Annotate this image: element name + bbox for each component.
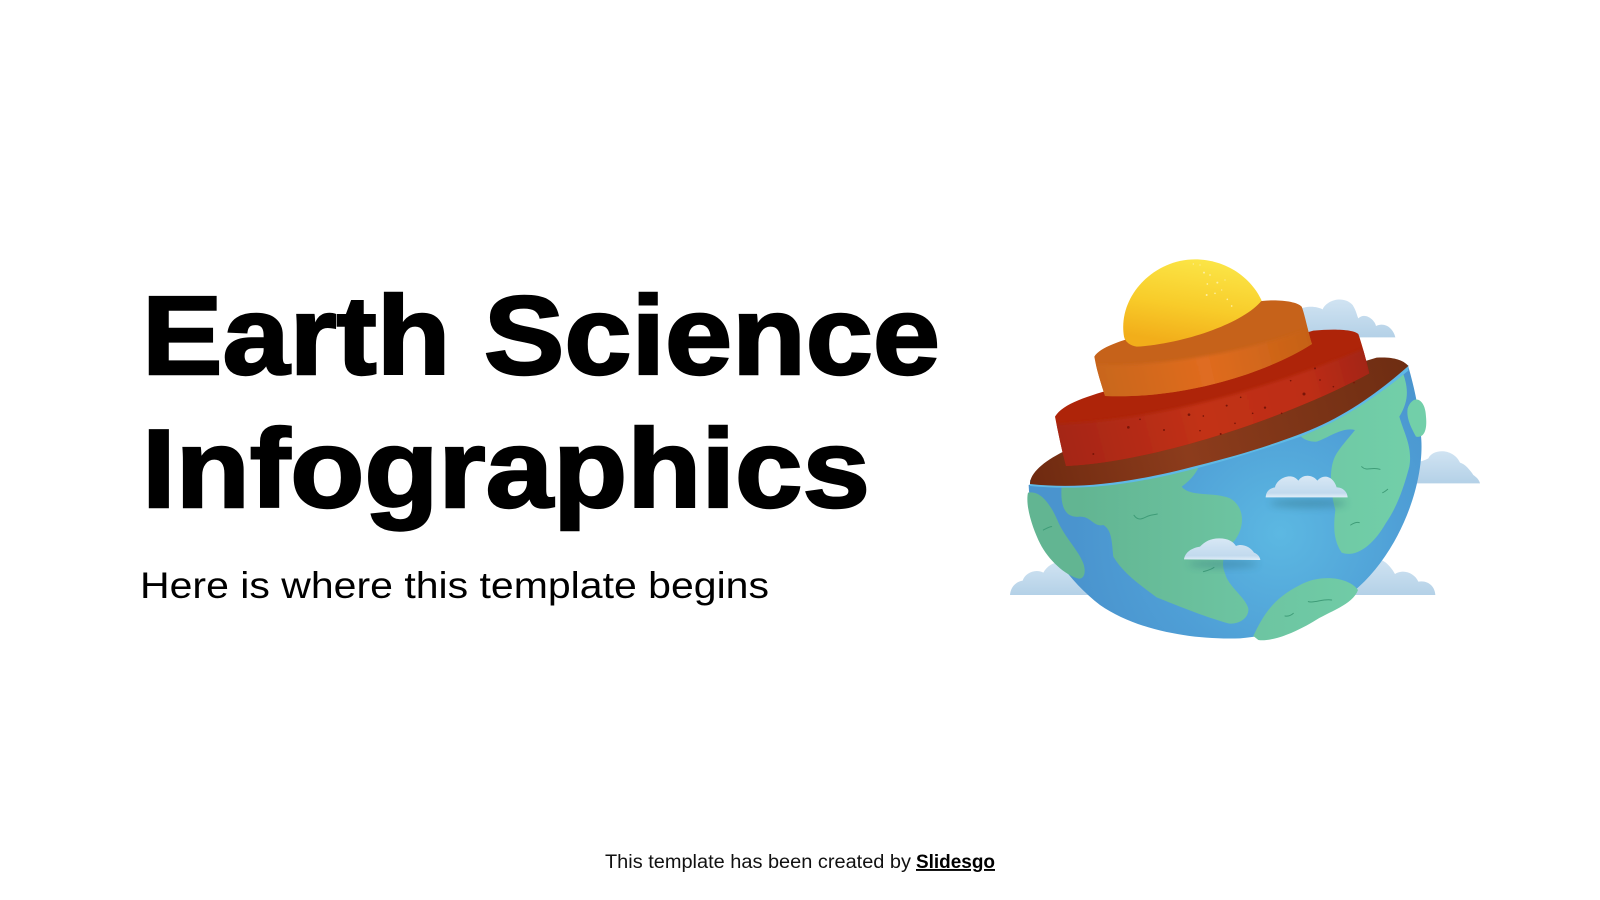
land: right continent (1297, 374, 1410, 554)
subtitle: Here is where this template begins (140, 565, 769, 606)
title: Infographics (142, 407, 870, 531)
footer credit: This template has been created by (605, 852, 912, 873)
land: south continent (1253, 578, 1358, 640)
cut surface rim (1030, 365, 1408, 488)
footer credit: Slidesgo (916, 852, 995, 873)
cloud: back top right (1297, 300, 1395, 337)
land: small east island (1407, 399, 1426, 437)
land: central continent (1061, 462, 1248, 624)
title (142, 274, 940, 532)
title: Earth Science (142, 274, 940, 398)
cloud: front lower with shadow (1184, 538, 1260, 567)
continents (1027, 374, 1426, 640)
layer: mantle (1055, 330, 1370, 466)
layer: outer core (1094, 300, 1312, 396)
illustration: earth layers globe (1010, 259, 1480, 640)
cloud: back right (1413, 451, 1480, 483)
cloud: front upper with shadow (1266, 476, 1348, 507)
cloud: back bottom left (1010, 562, 1113, 595)
land texture marks (1043, 467, 1388, 616)
land: left strip (1027, 492, 1085, 579)
cut surface: crust (1030, 357, 1408, 486)
globe ocean (1029, 367, 1422, 639)
layer: inner core (1123, 259, 1262, 347)
cloud: back bottom right (1347, 559, 1435, 595)
